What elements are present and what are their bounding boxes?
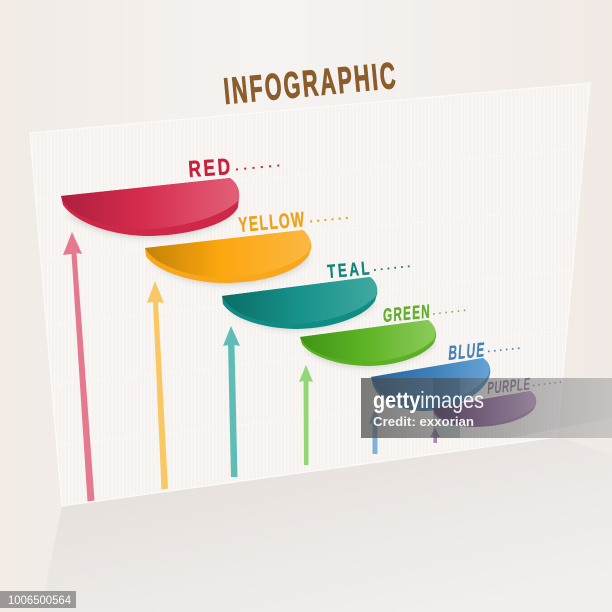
yellow label: YELLOW: [237, 207, 306, 237]
teal label: [327, 258, 412, 283]
purple disc: [433, 391, 536, 427]
watermark: getty images: [361, 378, 612, 438]
floor: [40, 436, 612, 612]
teal label: TEAL: [327, 258, 373, 283]
blue disc: [371, 358, 490, 411]
yellow label: [237, 207, 351, 237]
watermark: getty images: gettyimages: [373, 387, 484, 413]
blue label: BLUE: [448, 338, 486, 365]
arrow: red: [63, 232, 94, 502]
title: INFOGRAPHIC: [222, 56, 399, 113]
watermark: getty images: Credit: exxorian: [373, 415, 474, 429]
purple label: PURPLE: [487, 374, 531, 398]
arrow: yellow: [147, 281, 168, 490]
green label: [383, 302, 468, 327]
red disc: [61, 178, 239, 238]
red label: RED: [188, 155, 234, 183]
blue label: [448, 338, 521, 365]
panel: grid wall: [30, 83, 590, 506]
image id badge: 1006500564: [8, 595, 72, 607]
green disc: [300, 320, 436, 368]
purple label: [487, 374, 561, 398]
arrow: green: [299, 365, 313, 465]
green label: GREEN: [383, 302, 431, 327]
arrow: blue: [369, 408, 381, 454]
arrow: purple: [430, 428, 440, 443]
yellow disc: [145, 230, 311, 285]
arrow: teal: [223, 326, 240, 477]
red label: [188, 155, 284, 183]
teal disc: [222, 277, 377, 330]
image id badge: [0, 591, 76, 608]
